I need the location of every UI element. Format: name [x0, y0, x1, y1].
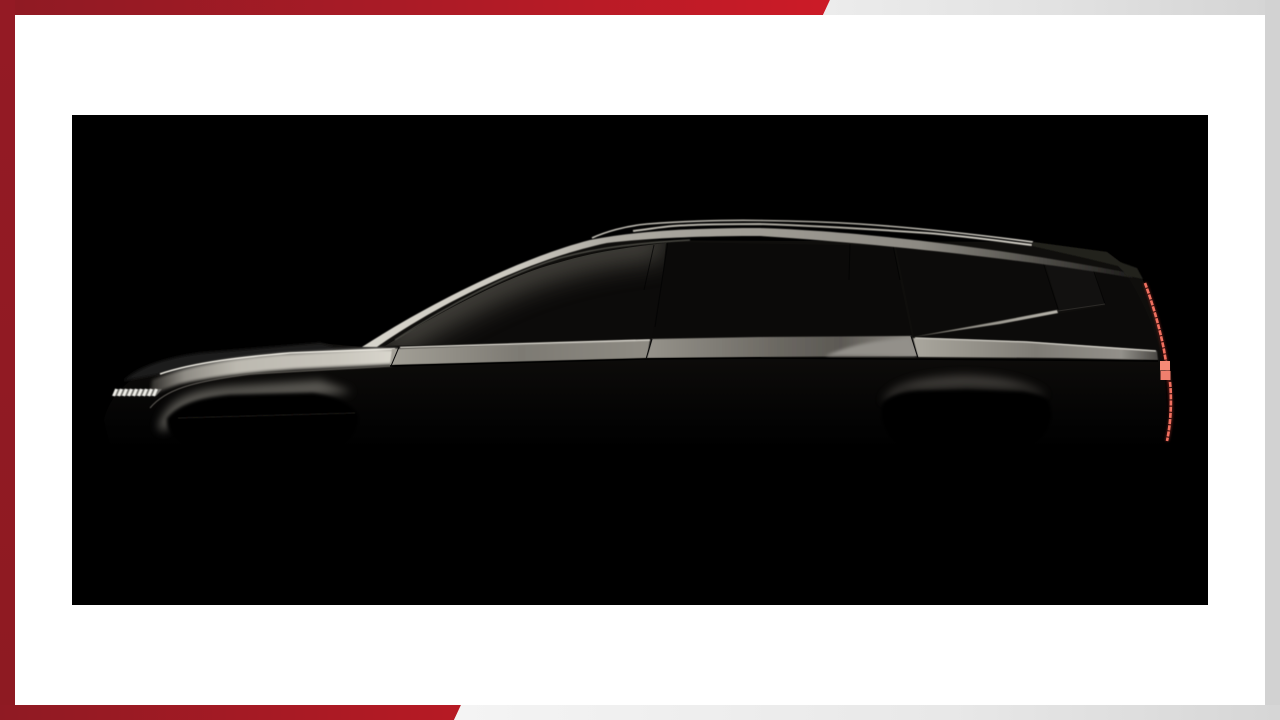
window pillar lines: [644, 241, 1105, 327]
front fender glow: [158, 380, 352, 432]
beltline rear door swoop: [825, 338, 917, 356]
body shell: [104, 240, 1168, 450]
beltline strip rear quarter: [913, 338, 1158, 360]
car silhouette: [104, 220, 1171, 455]
roof band inner reflection: [395, 240, 690, 340]
rear spoiler: [1032, 242, 1143, 279]
black image panel: [72, 115, 1208, 605]
roof band: [362, 228, 1133, 347]
hood top bright line: [160, 349, 395, 374]
top grey bar: [823, 0, 1280, 15]
bottom red bar: [0, 705, 461, 720]
bottom grey bar: [454, 705, 1280, 720]
rear wheel arch: [881, 390, 1051, 455]
front wheel arch: [167, 393, 359, 455]
left red bar: [0, 0, 15, 720]
front window edge glow: [385, 243, 666, 346]
rear fender glow: [882, 375, 1047, 402]
rear quarter glass: [1045, 263, 1105, 312]
right grey bar: [1265, 0, 1280, 720]
panel seams: [391, 336, 918, 366]
rear window slash highlight: [913, 310, 1058, 337]
hood top surface: [123, 343, 395, 381]
hood light band: [150, 348, 398, 396]
beltline lower shadow line: [390, 358, 1158, 366]
daytime running light: [112, 389, 162, 396]
rear quarter panel: [915, 270, 1159, 350]
middle window glass: [652, 242, 912, 338]
top red bar: [0, 0, 830, 15]
beltline strip rear door: [647, 336, 917, 358]
roof rail outer: [592, 220, 1033, 242]
hood lower edge line: [150, 366, 392, 408]
beltline strip front door top highlight: [400, 340, 650, 348]
rear window thin line: [1058, 304, 1105, 311]
front window glass: [385, 243, 666, 346]
beltline rear top highlight: [915, 338, 1156, 351]
rear window glass: [896, 247, 1058, 336]
front arch crease: [178, 413, 355, 418]
beltline strip front door: [390, 340, 650, 365]
roof rail inner: [633, 224, 1032, 245]
tail light: [1145, 283, 1171, 441]
